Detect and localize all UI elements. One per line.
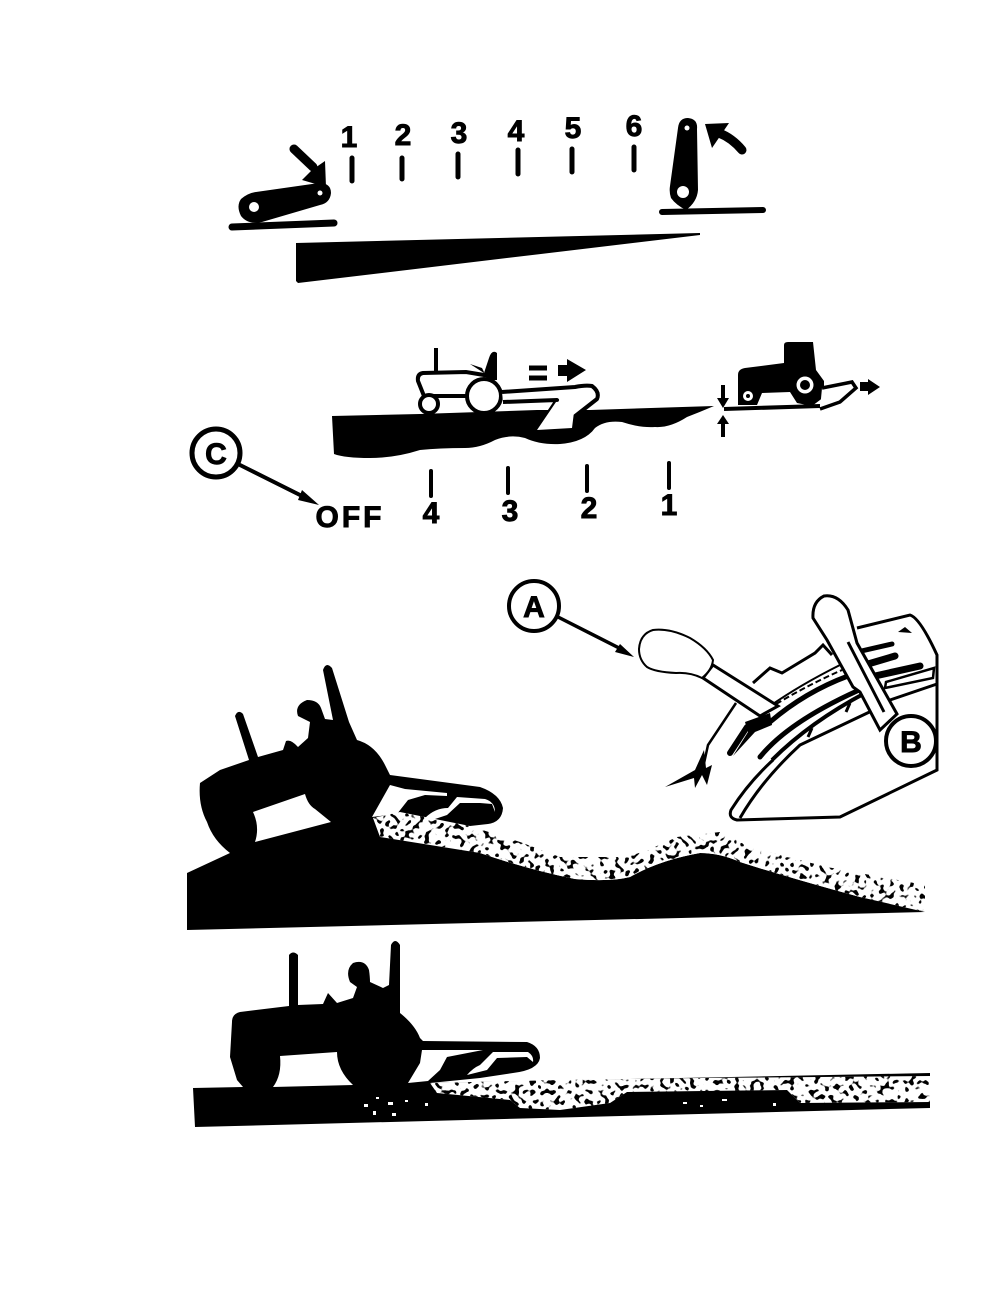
soil speckle band: [430, 1076, 930, 1110]
scale numbers 1 to 6: 3: [451, 117, 467, 150]
lever handle A: [639, 630, 778, 756]
label: B callout: [886, 716, 936, 766]
plow moldboard B: [467, 1052, 533, 1075]
arrow: forward: [558, 359, 586, 382]
plow moldboard A: [408, 1050, 483, 1083]
icon: lever lowered: [238, 183, 331, 223]
depth numbers 4 to 1: [423, 489, 677, 530]
depth tick marks: [431, 463, 669, 496]
wheel gap: [253, 794, 331, 842]
panel: tractor on uneven ground: [187, 665, 940, 930]
icon: tractor with plow, outline: [418, 348, 598, 430]
panel: lever position scale: [232, 110, 763, 283]
console outline: [730, 615, 937, 820]
scale numbers 1 to 6: 6: [626, 110, 642, 143]
lever base line left: [232, 223, 334, 227]
panel: tractor on level ground: [193, 941, 935, 1127]
plow moldboard B: [425, 797, 495, 820]
panel: control console with levers: [509, 581, 937, 820]
equals sign: [529, 368, 547, 378]
wheel gap: [273, 1052, 353, 1087]
panel: depth control with plow: [192, 342, 880, 534]
depth numbers 4 to 1: 3: [502, 495, 518, 528]
icon: tractor silhouette with hitch and ground: [193, 941, 930, 1127]
label: C callout: C: [205, 438, 227, 471]
soil speckle band: [373, 812, 925, 912]
depth numbers 4 to 1: 1: [661, 489, 677, 522]
plow moldboard A: [372, 785, 447, 817]
lever base line right: [662, 210, 763, 212]
label: A callout: [509, 581, 634, 657]
arrow: up from lever: [705, 123, 742, 150]
arrow: forward small: [860, 379, 880, 395]
icon: lever raised: [670, 118, 698, 210]
depth numbers 4 to 1: 4: [423, 497, 440, 530]
soil profile: [332, 406, 714, 458]
scale numbers 1 to 6: 1: [341, 121, 357, 154]
icon: tractor silhouette with hitch and ground: [187, 665, 925, 930]
scale numbers 1 to 6: 4: [508, 115, 525, 148]
scale numbers 1 to 6: 2: [395, 119, 411, 152]
label: A callout: A: [523, 591, 545, 624]
plow shadow fill: [385, 810, 470, 826]
console slots: [730, 644, 920, 760]
lever handle B: [813, 596, 897, 730]
lever B edge: [848, 642, 884, 712]
arrows: raise height indicator: [717, 385, 729, 437]
scale tick marks: [352, 147, 634, 181]
depth numbers 4 to 1: 2: [581, 492, 597, 525]
icon: tractor raised plow, solid: [724, 342, 856, 409]
wedge depth bar: [296, 233, 700, 283]
infographic: tractor hitch control diagrams: [187, 114, 938, 1127]
label: C callout: [192, 429, 319, 505]
scale numbers 1 to 6: 5: [565, 112, 581, 145]
label: B callout: B: [900, 726, 922, 759]
small indicator mark: [898, 627, 912, 633]
scattered white soil flecks: [364, 1097, 776, 1116]
arrow: down to lever: [294, 149, 326, 187]
scale numbers 1 to 6: [341, 110, 642, 154]
label: OFF: OFF: [316, 501, 384, 534]
linkage and tuft: [665, 703, 736, 788]
